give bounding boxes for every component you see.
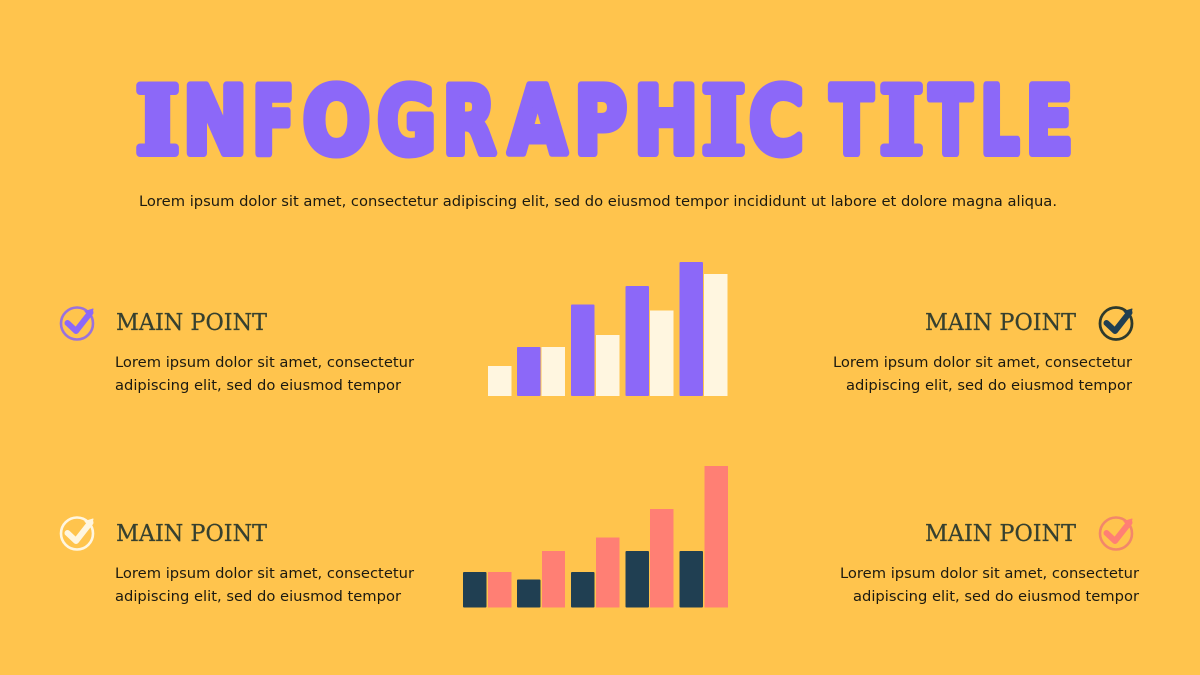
- title: R: [443, 67, 496, 175]
- title: P: [574, 67, 627, 175]
- title: O: [303, 67, 370, 175]
- title: H: [634, 67, 698, 175]
- icon: purple check: [61, 308, 93, 340]
- heading: MAIN POINT: [116, 308, 267, 336]
- text block: Lorem ipsum dolor sit amet, consectetur: [115, 355, 414, 371]
- subtitle: Lorem ipsum dolor sit amet, consectetur adipiscing elit, sed do eiusmod tempor incididunt ut labore et dolore magna aliqua.: [139, 194, 1057, 210]
- text block: adipiscing elit, sed do eiusmod tempor: [853, 589, 1139, 605]
- panel: bottom right main point: [840, 518, 1139, 605]
- text block: adipiscing elit, sed do eiusmod tempor: [115, 589, 401, 605]
- title: N: [183, 67, 247, 175]
- title: T: [830, 67, 873, 175]
- text block: Lorem ipsum dolor sit amet, consectetur: [115, 566, 414, 582]
- icon: navy check: [1100, 308, 1132, 340]
- icon: cream check: [61, 518, 93, 550]
- title: I: [880, 66, 923, 175]
- text block: [833, 355, 1132, 394]
- heading: MAIN POINT: [925, 308, 1076, 336]
- bar chart: purple and cream: [488, 262, 728, 396]
- title: L: [980, 67, 1019, 175]
- panel: bottom left main point: [61, 518, 414, 605]
- icon: coral check: [1100, 518, 1132, 550]
- text block: Lorem ipsum dolor sit amet, consectetur: [833, 355, 1132, 371]
- title: I: [702, 66, 745, 175]
- text block: [840, 566, 1139, 605]
- text block: [115, 566, 414, 605]
- text block: adipiscing elit, sed do eiusmod tempor: [846, 378, 1132, 394]
- title: G: [377, 67, 436, 175]
- bar chart: navy and coral: [463, 466, 728, 608]
- text block: [115, 355, 414, 394]
- heading: MAIN POINT: [925, 519, 1076, 547]
- title: F: [252, 67, 294, 175]
- text block: adipiscing elit, sed do eiusmod tempor: [115, 378, 401, 394]
- panel: top right main point: [833, 308, 1132, 394]
- title: C: [749, 67, 804, 175]
- title: E: [1026, 67, 1073, 175]
- title: T: [929, 67, 972, 175]
- heading: MAIN POINT: [116, 519, 267, 547]
- panel: top left main point: [61, 308, 414, 394]
- title: I: [136, 66, 179, 175]
- title: A: [509, 67, 566, 175]
- text block: Lorem ipsum dolor sit amet, consectetur: [840, 566, 1139, 582]
